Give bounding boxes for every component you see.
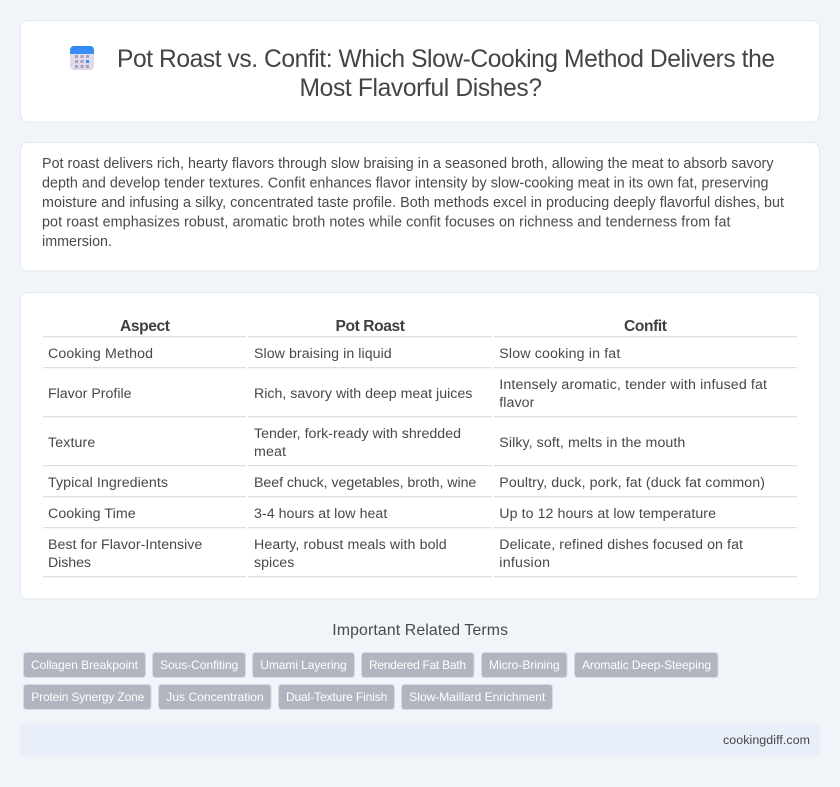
row: cooking time: Cooking Time [48, 506, 136, 522]
title: Pot Roast vs. Confit: Which Slow-Cooking Method Delivers the [117, 46, 775, 73]
table grid lines [43, 336, 797, 577]
summary paragraph: Pot roast delivers rich, hearty flavors through slow braising in a seasoned broth, allowing the meat to absorb savory [42, 156, 774, 172]
footer bar [20, 723, 820, 757]
row: typical ingredients [48, 475, 765, 491]
tag: Micro-Brining [482, 652, 567, 678]
title: Most Flavorful Dishes? [300, 75, 542, 102]
row: best for flavor-intensive dishes: Best for Flavor-Intensive [48, 537, 202, 553]
row: typical ingredients: Beef chuck, vegetables, broth, wine [254, 475, 476, 491]
row: best for flavor-intensive dishes: infusion [499, 555, 550, 571]
row: texture: Texture [48, 435, 95, 451]
table header row [120, 318, 667, 335]
panel: summary text [20, 142, 820, 271]
row: best for flavor-intensive dishes: spices [254, 555, 294, 571]
tag: Umami Layering [252, 652, 354, 678]
row: flavor profile: Flavor Profile [48, 386, 132, 402]
tag: Jus Concentration [158, 684, 271, 710]
summary paragraph: depth and develop tender textures. Confit enhances flavor intensity by slow-cooking meat in its own fat, preserving [42, 176, 769, 192]
heading: important related terms: Important Related Terms [332, 622, 508, 639]
table header row: Pot Roast [336, 318, 405, 335]
icon: calendar [70, 46, 94, 70]
panel: comparison table [20, 292, 820, 599]
tag: Protein Synergy Zone [24, 684, 151, 710]
title [117, 46, 775, 102]
summary paragraph [42, 156, 784, 250]
tag: Sous-Confiting [152, 652, 246, 678]
header panel [20, 20, 820, 122]
row: best for flavor-intensive dishes: Dishes [48, 555, 91, 571]
row: texture [48, 426, 685, 460]
row: flavor profile: Intensely aromatic, tender with infused fat [499, 377, 767, 393]
row: flavor profile: flavor [499, 395, 535, 411]
row: cooking time: 3-4 hours at low heat [254, 506, 387, 522]
summary paragraph: pot roast emphasizes robust, aromatic broth notes while confit focuses on richness and tenderness from fat [42, 214, 731, 230]
row: best for flavor-intensive dishes [48, 537, 743, 571]
summary paragraph: moisture and infusing a silky, concentrated taste profile. Both methods excel in producing deeply flavorful dishes, but [42, 195, 784, 211]
row: flavor profile: Rich, savory with deep meat juices [254, 386, 472, 402]
row: cooking time [48, 506, 716, 522]
summary paragraph: immersion. [42, 234, 112, 250]
row: texture: Tender, fork-ready with shredded [254, 426, 461, 442]
tag: Aromatic Deep-Steeping: Aromatic Deep-Steeping [582, 658, 711, 672]
row: best for flavor-intensive dishes: Delicate, refined dishes focused on fat [499, 537, 743, 553]
row: cooking method [48, 346, 620, 362]
table header row: Confit [624, 318, 667, 335]
row: best for flavor-intensive dishes: Hearty, robust meals with bold [254, 537, 447, 553]
tag: Sous-Confiting: Sous-Confiting [160, 658, 238, 672]
table header row: Aspect [120, 318, 170, 335]
tag: Jus Concentration: Jus Concentration [166, 690, 264, 704]
tag: Aromatic Deep-Steeping [574, 652, 718, 678]
tag: Dual-Texture Finish: Dual-Texture Finish [286, 690, 387, 704]
row: cooking method: Slow braising in liquid [254, 346, 392, 362]
row: texture: meat [254, 444, 286, 460]
tag: Dual-Texture Finish [278, 684, 394, 710]
tag: Rendered Fat Bath: Rendered Fat Bath [369, 658, 466, 672]
row: typical ingredients: Poultry, duck, pork, fat (duck fat common) [499, 475, 765, 491]
row: typical ingredients: Typical Ingredients [48, 475, 168, 491]
row: cooking method: Cooking Method [48, 346, 153, 362]
row: texture: Silky, soft, melts in the mouth [499, 435, 685, 451]
tag: Protein Synergy Zone: Protein Synergy Zone [31, 690, 145, 704]
tag: Umami Layering: Umami Layering [260, 658, 347, 672]
tag: Rendered Fat Bath [362, 652, 474, 678]
tag: Slow-Maillard Enrichment [402, 684, 552, 710]
footer bar: cookingdiff.com [723, 733, 810, 747]
tag: Collagen Breakpoint: Collagen Breakpoint [31, 658, 139, 672]
tag: Collagen Breakpoint [24, 652, 146, 678]
row: cooking method: Slow cooking in fat [499, 346, 620, 362]
tag: Slow-Maillard Enrichment: Slow-Maillard Enrichment [409, 690, 546, 704]
row: cooking time: Up to 12 hours at low temperature [499, 506, 716, 522]
tag: Micro-Brining: Micro-Brining [489, 658, 560, 672]
row: flavor profile [48, 377, 767, 411]
